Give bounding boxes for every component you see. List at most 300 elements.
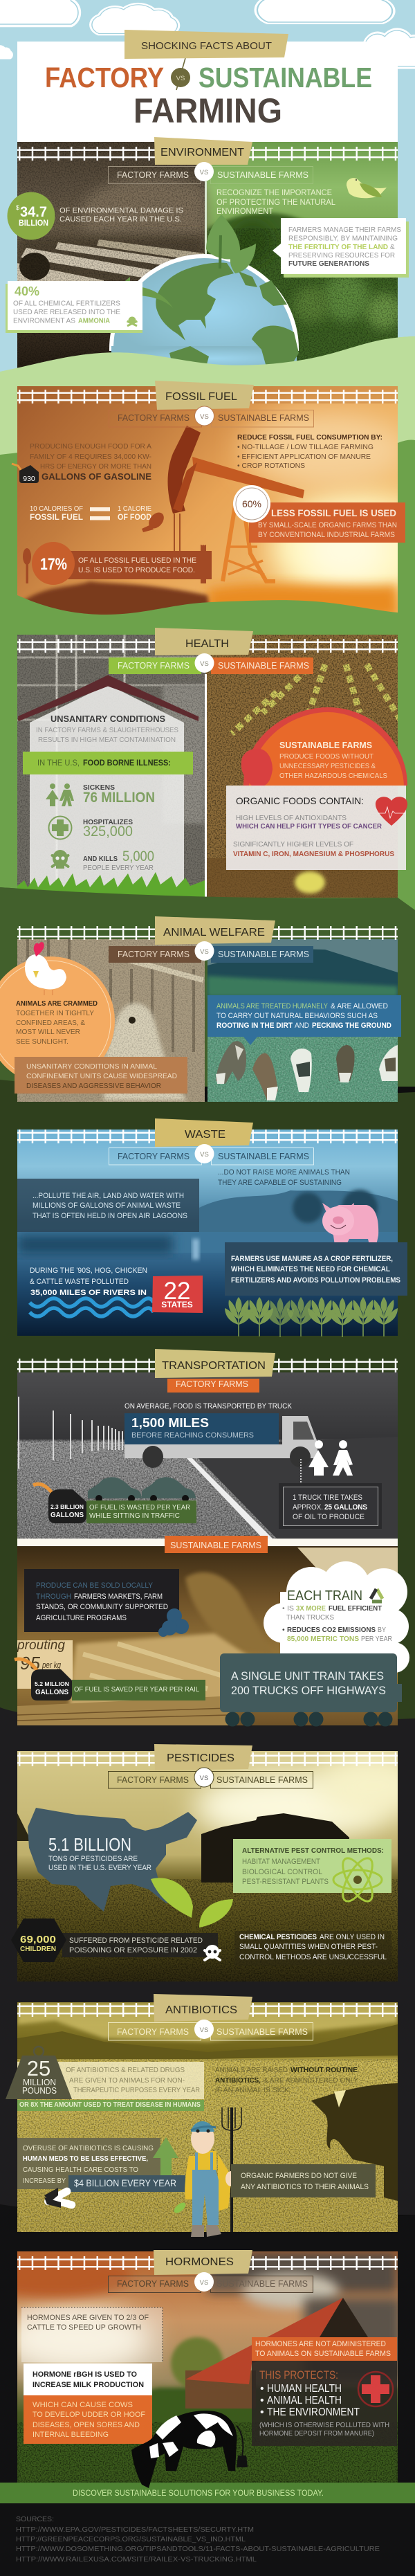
banner: food borne illness: IN THE U.S, bbox=[37, 759, 80, 768]
icon: wheat bbox=[225, 1297, 398, 1337]
vs badge: VS bbox=[176, 75, 185, 82]
heading sign: antibiotics bbox=[154, 1994, 252, 2022]
box: pollute: ...POLLUTE THE AIR, LAND AND WATER WITH bbox=[33, 1192, 184, 1200]
sources: HTTP://WWW.RAILEXUSA.COM/SITE/RAILEX-VS-TRUCKING.HTML bbox=[16, 2555, 257, 2564]
sources: HTTP://WWW.DOSOMETHING.ORG/TIPSANDTOOLS/11-FACTS-ABOUT-SUSTAINABLE-AGRICULTURE bbox=[16, 2545, 380, 2553]
box: organic foods contain: WHICH CAN HELP FIGHT TYPES OF CANCER bbox=[236, 822, 382, 831]
cloud: each train: THAN TRUCKS bbox=[286, 1613, 334, 1622]
box: truck tire: 25 GALLONS bbox=[324, 1503, 367, 1512]
cloud: each train: 3X MORE bbox=[296, 1604, 326, 1613]
fence bbox=[17, 639, 398, 653]
cloud: each train bbox=[264, 1561, 409, 1673]
icon: river waves bbox=[30, 1298, 154, 1316]
vs circle bbox=[194, 2272, 214, 2292]
stat: 69000 children bbox=[11, 1919, 218, 1962]
stat: $34.7 billion bbox=[7, 192, 55, 239]
text: sustainable farms produce: OTHER HAZARDOUS CHEMICALS bbox=[279, 772, 387, 780]
heading sign: waste: WASTE bbox=[185, 1129, 225, 1141]
heading sign: fossil fuel bbox=[155, 381, 254, 410]
callout: 40 percent: AMMONIA bbox=[78, 317, 110, 325]
callout: 40 percent: USED ARE RELEASED INTO THE bbox=[13, 308, 120, 316]
heading sign: antibiotics: ANTIBIOTICS bbox=[165, 2004, 237, 2016]
stat: sickens bbox=[83, 784, 155, 806]
icon: pig bbox=[322, 1203, 378, 1246]
box: produce sold locally: AGRICULTURE PROGRAMS bbox=[36, 1614, 127, 1622]
box: not administered: • bbox=[260, 2383, 264, 2395]
vs circle bbox=[195, 941, 214, 961]
circle: animals are crammed: MOST WILL NEVER bbox=[16, 1028, 80, 1036]
callout: blue text box: ANIMALS ARE TREATED HUMANELY bbox=[216, 1002, 329, 1010]
panel: transportation factory bbox=[17, 1349, 415, 1539]
box: rbgh: INTERNAL BLEEDING bbox=[33, 2431, 109, 2439]
tag: factory farms: FACTORY FARMS bbox=[118, 412, 190, 423]
box: produce sold locally: STANDS, OR COMMUNITY SUPPORTED bbox=[36, 1603, 168, 1611]
cloud: each train: • bbox=[282, 1604, 285, 1613]
map: usa: TONS OF PESTICIDES ARE bbox=[48, 1855, 138, 1863]
tag: sustainable farms: SUSTAINABLE FARMS bbox=[218, 412, 309, 423]
heading sign: waste bbox=[155, 1118, 253, 1147]
box: truck tire: 1 TRUCK TIRE TAKES bbox=[293, 1494, 362, 1502]
icon: leaves bbox=[206, 215, 256, 273]
fence bbox=[17, 2003, 398, 2017]
stat: $34.7 billion: 34.7 bbox=[20, 204, 47, 220]
text: reduce fossil fuel bbox=[237, 433, 382, 470]
stat: sickens: 76 MILLION bbox=[83, 790, 155, 806]
cloud: each train: IS bbox=[287, 1604, 294, 1613]
tag: sustainable farms: SUSTAINABLE FARMS bbox=[216, 1775, 308, 1785]
continent shapes bbox=[156, 263, 299, 367]
stat: 1500 miles bbox=[124, 1413, 279, 1444]
icon: weight 25 million pounds bbox=[6, 2047, 72, 2099]
tag: factory farms bbox=[109, 657, 201, 674]
text: reduce fossil fuel: REDUCE FOSSIL FUEL CONSUMPTION BY: bbox=[237, 433, 382, 442]
vs circle: VS bbox=[200, 169, 208, 176]
vs badge bbox=[171, 68, 190, 87]
tag: factory farms bbox=[108, 166, 201, 184]
dotted connector bbox=[300, 1459, 302, 1483]
heading sign: transportation: TRANSPORTATION bbox=[162, 1360, 266, 1372]
cows bbox=[216, 1041, 398, 1100]
tag: factory farms bbox=[108, 2276, 201, 2292]
tag: sustainable farms: SUSTAINABLE FARMS bbox=[216, 2026, 308, 2037]
panel: waste bbox=[17, 1118, 407, 1337]
tag: factory farms: FACTORY FARMS bbox=[117, 2278, 189, 2289]
tag: factory farms bbox=[108, 2022, 201, 2040]
stat: 69000 children: SUFFERED FROM PESTICIDE RELATED bbox=[69, 1936, 203, 1945]
icon: people bbox=[308, 1440, 353, 1476]
text: reduce fossil fuel: • EFFICIENT APPLICATION OF MANURE bbox=[237, 453, 371, 461]
stat: 17 percent: OF ALL FOSSIL FUEL USED IN THE bbox=[78, 556, 196, 565]
box: chemical pesticides: CONTROL METHODS ARE UNSUCCESSFUL bbox=[239, 1953, 387, 1961]
callout: 60 percent: BY SMALL-SCALE ORGANIC FARMS THAN bbox=[258, 521, 397, 529]
vs circle: VS bbox=[200, 2279, 208, 2287]
stat: 22 states: STATES bbox=[161, 1300, 193, 1309]
globe bbox=[111, 256, 299, 367]
title sign: shocking facts about: SHOCKING FACTS ABOUT bbox=[141, 41, 272, 52]
icon: skull bbox=[50, 850, 70, 869]
text: rivers polluted: 35,000 MILES OF RIVERS IN bbox=[30, 1289, 147, 1297]
box: not administered: ANIMAL HEALTH bbox=[267, 2395, 342, 2406]
tractor silhouette bbox=[201, 1813, 349, 1883]
callout: 40 percent bbox=[6, 281, 142, 333]
panel: antibiotics bbox=[6, 1994, 398, 2237]
box: hormones given: HORMONES ARE GIVEN TO 2/3 OF bbox=[27, 2314, 149, 2322]
box: truck tire: APPROX. bbox=[293, 1503, 323, 1512]
stat: fuel wasted: WHILE SITTING IN TRAFFIC bbox=[89, 1512, 180, 1520]
stat: fuel wasted bbox=[33, 1484, 196, 1523]
callout: blue text box: ROOTING IN THE DIRT bbox=[216, 1022, 293, 1030]
text: environmental damage bbox=[59, 206, 183, 224]
heading sign: environment bbox=[154, 137, 252, 165]
tag: sustainable farms bbox=[212, 410, 314, 427]
vs circle bbox=[195, 1144, 214, 1163]
icon: pepper bbox=[241, 749, 273, 786]
equation: calories bbox=[30, 505, 151, 522]
stat: kills bbox=[83, 849, 154, 872]
text: average food transport: ON AVERAGE, FOOD IS TRANSPORTED BY TRUCK bbox=[124, 1402, 293, 1411]
text: sustainable farms produce: UNNECESSARY PESTICIDES & bbox=[279, 762, 376, 770]
cow bbox=[311, 2083, 398, 2201]
box: produce sold locally: THROUGH bbox=[36, 1593, 71, 1601]
tag: factory farms bbox=[109, 1148, 202, 1165]
stat: 22 states: 22 bbox=[164, 1278, 190, 1305]
cloud: each train: PER YEAR bbox=[361, 1635, 392, 1643]
icon: chicken leg bbox=[142, 509, 167, 532]
stat: kills: PEOPLE EVERY YEAR bbox=[83, 864, 154, 872]
icon: people bbox=[46, 783, 74, 806]
tag: sustainable farms bbox=[165, 1536, 268, 1553]
circle: animals are crammed: SEE SUNLIGHT. bbox=[16, 1037, 68, 1046]
text: recognize importance: RECOGNIZE THE IMPORTANCE bbox=[216, 189, 332, 197]
band: discover bbox=[0, 2483, 415, 2503]
text: producing enough food: FAMILY OF 4 REQUIRES 34,000 KW- bbox=[30, 453, 151, 461]
box: produce sold locally: FARMERS MARKETS, FARM bbox=[74, 1593, 163, 1601]
stat: fuel wasted: OF FUEL IS WASTED PER YEAR bbox=[89, 1503, 190, 1512]
stat: $34.7 billion: $ bbox=[16, 204, 19, 211]
panel: fossil fuel bbox=[12, 381, 415, 626]
vs circle: VS bbox=[200, 660, 209, 668]
panel: transportation sustainable: prouting bbox=[17, 1638, 65, 1653]
icon: spoon and fork bbox=[23, 545, 206, 583]
title: sustainable: SUSTAINABLE bbox=[199, 62, 372, 93]
text: producing enough food: HRS OF ENERGY OR MORE THAN bbox=[40, 462, 151, 471]
heading sign: environment: ENVIRONMENT bbox=[160, 147, 245, 158]
equation: calories: OF FOOD bbox=[118, 514, 151, 522]
box: alternative pest control: BIOLOGICAL CONTROL bbox=[242, 1868, 322, 1876]
icon: grapes bbox=[158, 1608, 189, 1637]
text: rivers polluted: & CATTLE WASTE POLLUTED bbox=[30, 1278, 129, 1286]
text: sustainable farms produce bbox=[279, 740, 387, 780]
banner: food borne illness bbox=[23, 752, 193, 774]
stat: hospitalizes: HOSPITALIZES bbox=[83, 819, 133, 826]
map: usa bbox=[28, 1808, 197, 1912]
heading sign: animal welfare bbox=[155, 916, 275, 945]
box: alternative pest control: HABITAT MANAGEMENT bbox=[242, 1858, 320, 1866]
arrow bbox=[113, 277, 173, 308]
box: overuse of antibiotics: OVERUSE OF ANTIBIOTICS IS CAUSING bbox=[23, 2144, 154, 2152]
box: truck tire: OF OIL TO PRODUCE bbox=[293, 1513, 365, 1521]
tag: sustainable farms bbox=[212, 1148, 314, 1165]
text: producing enough food bbox=[30, 442, 151, 482]
stat: 69000 children: POISONING OR EXPOSURE IN 2002 bbox=[69, 1946, 197, 1954]
icon: medical cross bbox=[48, 817, 72, 839]
stat: fuel saved: 5.2 MILLION bbox=[35, 1680, 69, 1687]
tag: sustainable farms bbox=[210, 2022, 313, 2040]
stat: 22 states bbox=[152, 1276, 203, 1313]
box: not administered: (WHICH IS OTHERWISE POLLUTED WITH bbox=[259, 2421, 389, 2429]
tag: factory farms: FACTORY FARMS bbox=[117, 1775, 189, 1785]
tag: sustainable farms: SUSTAINABLE FARMS bbox=[218, 949, 309, 959]
vs circle bbox=[194, 1768, 214, 1787]
equation: calories: 10 CALORIES OF bbox=[30, 505, 83, 513]
stat: hospitalizes: 325,000 bbox=[83, 824, 133, 840]
box: antibiotics given: OR 8X THE AMOUNT USED TO TREAT DISEASE IN HUMANS bbox=[19, 2101, 201, 2109]
icon: cars in traffic bbox=[88, 1477, 196, 1502]
box: unsanitary conditions: UNSANITARY CONDITIONS IN ANIMAL bbox=[26, 1062, 157, 1071]
box: not administered: THIS PROTECTS: bbox=[259, 2368, 338, 2382]
callout: 60 percent: BY CONVENTIONAL INDUSTRIAL FARMS bbox=[258, 531, 395, 539]
panel: animal welfare bbox=[0, 916, 401, 1102]
cloud: each train: EACH TRAIN bbox=[287, 1588, 362, 1604]
stat: 1500 miles: BEFORE REACHING CONSUMERS bbox=[131, 1431, 254, 1440]
icon: pills bbox=[43, 2186, 77, 2209]
box: manure bbox=[225, 1242, 407, 1296]
tag: sustainable farms: SUSTAINABLE FARMS bbox=[218, 1151, 309, 1161]
box: antibiotics given: ARE GIVEN TO ANIMALS FOR NON- bbox=[69, 2076, 185, 2085]
text: without routine antibiotics: ANTIBIOTICS, bbox=[215, 2076, 261, 2085]
icon: train bbox=[220, 1653, 402, 1726]
box: overuse of antibiotics: INCREASE BY bbox=[23, 2177, 66, 2185]
text: unsanitary conditions: IN FACTORY FARMS & SLAUGHTERHOUSES bbox=[36, 726, 178, 734]
text: without routine antibiotics: IF AN ANIMAL IS SICK bbox=[215, 2086, 289, 2094]
stat: sickens: SICKENS bbox=[83, 784, 115, 792]
hill bbox=[17, 595, 398, 626]
cloud: each train: • bbox=[282, 1626, 285, 1634]
tag: factory farms bbox=[109, 946, 201, 963]
text: unsanitary conditions: RESULTS IN HIGH MEAT CONTAMINATION bbox=[38, 736, 176, 744]
text: rivers polluted: DURING THE '90S, HOG, CHICKEN bbox=[30, 1267, 147, 1275]
vs circle: VS bbox=[200, 948, 209, 956]
text: do not raise bbox=[218, 1168, 350, 1187]
box: rbgh: TO DEVELOP UDDER OR HOOF bbox=[33, 2411, 145, 2419]
box: chemical pesticides: ARE ONLY USED IN bbox=[320, 1933, 385, 1941]
callout: 60 percent: LESS FOSSIL FUEL IS USED bbox=[271, 507, 396, 518]
grass bbox=[17, 872, 205, 898]
panel: transportation sustainable: per kg bbox=[42, 1660, 62, 1670]
box: pollute bbox=[17, 1179, 199, 1232]
text: sustainable farms produce: PRODUCE FOODS WITHOUT bbox=[279, 752, 374, 761]
heading sign: hormones: HORMONES bbox=[165, 2256, 234, 2268]
arrow up bbox=[153, 2137, 178, 2175]
band: discover: DISCOVER SUSTAINABLE SOLUTIONS FOR YOUR BUSINESS TODAY. bbox=[73, 2489, 324, 2498]
box: rbgh: DISEASES, OPEN SORES AND bbox=[33, 2421, 140, 2429]
fence bbox=[17, 147, 398, 161]
vs circle bbox=[195, 406, 214, 426]
tag: factory farms bbox=[108, 1772, 201, 1788]
box: manure: FERTILIZERS AND AVOIDS POLLUTION PROBLEMS bbox=[231, 1276, 400, 1285]
box: alternative pest control: PEST-RESISTANT PLANTS bbox=[242, 1878, 329, 1886]
text: environmental damage: OF ENVIRONMENTAL DAMAGE IS bbox=[59, 206, 183, 215]
vs circle: VS bbox=[200, 1151, 209, 1159]
icon: skull bbox=[203, 1945, 222, 1962]
box: pollute: MILLIONS OF GALLONS OF ANIMAL WASTE bbox=[33, 1201, 181, 1210]
callout: blue text box: PECKING THE GROUND bbox=[312, 1022, 391, 1030]
box: unsanitary conditions: DISEASES AND AGGRESSIVE BEHAVIOR bbox=[26, 1082, 161, 1090]
text: do not raise: THEY ARE CAPABLE OF SUSTAINING bbox=[218, 1179, 342, 1187]
text: recognize importance: ENVIRONMENT bbox=[216, 208, 273, 216]
circle: animals are crammed: TOGETHER IN TIGHTLY bbox=[16, 1009, 94, 1017]
icon: weight 25 million pounds: POUNDS bbox=[22, 2085, 57, 2096]
title: farming: FARMING bbox=[133, 91, 282, 130]
text: sustainable farms produce: SUSTAINABLE FARMS bbox=[279, 740, 372, 750]
stat: kills: 5,000 bbox=[122, 849, 154, 864]
heading sign: transportation bbox=[155, 1349, 275, 1378]
panel: transportation sustainable bbox=[15, 1536, 409, 1726]
fence bbox=[17, 390, 398, 403]
tag: factory farms: FACTORY FARMS bbox=[117, 2026, 189, 2037]
cloud: each train: BY bbox=[378, 1626, 386, 1634]
box: not administered: TO ANIMALS ON SUSTAINABLE FARMS bbox=[255, 2350, 391, 2358]
title sign: shocking facts about bbox=[124, 30, 288, 59]
callout: 60 percent: 60% bbox=[242, 498, 261, 509]
tag: factory farms bbox=[109, 410, 202, 427]
sources: SOURCES: bbox=[16, 2515, 54, 2523]
tag: sustainable farms: SUSTAINABLE FARMS bbox=[217, 170, 308, 180]
vs circle: VS bbox=[200, 413, 209, 421]
box: chemical pesticides bbox=[234, 1931, 391, 1966]
box: rbgh: INCREASE MILK PRODUCTION bbox=[33, 2381, 144, 2389]
icon: weight 25 million pounds: MILLION bbox=[23, 2077, 56, 2087]
text: unsanitary conditions: UNSANITARY CONDITIONS bbox=[50, 714, 165, 724]
map: usa: 5.1 BILLION bbox=[48, 1834, 131, 1855]
stat: fuel saved bbox=[15, 1659, 205, 1700]
box: not administered: • bbox=[260, 2395, 264, 2406]
sources: HTTP://WWW.EPA.GOV/PESTICIDES/FACTSHEETS/SECURTY.HTM bbox=[16, 2525, 254, 2534]
box: chemical pesticides: CHEMICAL PESTICIDES bbox=[239, 1933, 317, 1941]
icon: fuel jug 930 bbox=[12, 464, 39, 483]
tag: factory farms: FACTORY FARMS bbox=[118, 660, 190, 671]
box: unsanitary conditions bbox=[15, 1057, 187, 1094]
icon: fuel jug 930: 930 bbox=[23, 475, 35, 483]
box: manure: WHICH ELIMINATES THE NEED FOR CHEMICAL bbox=[231, 1265, 390, 1273]
callout: 60 percent bbox=[233, 485, 405, 543]
equation: calories: 1 CALORIE bbox=[118, 505, 151, 513]
box: alternative pest control bbox=[233, 1839, 391, 1905]
box: rbgh: WHICH CAN CAUSE COWS bbox=[33, 2401, 133, 2409]
text: recognize importance: OF PROTECTING THE NATURAL bbox=[216, 199, 336, 207]
callout: 40 percent: OF ALL CHEMICAL FERTILIZERS bbox=[13, 299, 120, 307]
tag: sustainable farms: SUSTAINABLE FARMS bbox=[216, 2278, 308, 2289]
box: rbgh bbox=[24, 2364, 152, 2444]
icon: weight 25 million pounds: 25 bbox=[27, 2056, 50, 2080]
box: hormones given bbox=[21, 2307, 163, 2362]
stat: fuel wasted: GALLONS bbox=[50, 1511, 84, 1519]
box: overuse of antibiotics: CAUSING HEALTH CARE COSTS TO bbox=[23, 2166, 138, 2174]
callout: farmers manage: FUTURE GENERATIONS bbox=[288, 260, 369, 268]
box: manure: FARMERS USE MANURE AS A CROP FERTILIZER, bbox=[231, 1255, 393, 1263]
heading sign: health bbox=[155, 628, 253, 655]
circle: animals are crammed: CONFINED AREAS, & bbox=[16, 1019, 85, 1027]
vs circle: VS bbox=[200, 1775, 208, 1782]
fence bbox=[17, 1359, 398, 1372]
fence bbox=[17, 1130, 398, 1143]
icon: heart bbox=[376, 797, 407, 826]
tag: factory farms: FACTORY FARMS bbox=[176, 1379, 248, 1389]
callout: farmers manage: PRESERVING RESOURCES FOR bbox=[288, 252, 395, 260]
tag: sustainable farms bbox=[211, 946, 313, 963]
box: not administered bbox=[252, 2337, 397, 2446]
box: not administered: HORMONE DEPOSIT FROM MANURE) bbox=[259, 2429, 374, 2438]
box: antibiotics given bbox=[17, 2062, 204, 2111]
box: antibiotics given: THERAPEUTIC PURPOSES EVERY YEAR bbox=[73, 2086, 200, 2094]
heading sign: pesticides bbox=[154, 1744, 252, 1770]
text: without routine antibiotics: & ARE ADMINISTERED ONLY bbox=[264, 2076, 358, 2085]
box: not administered: THE ENVIRONMENT bbox=[267, 2406, 360, 2418]
text: producing enough food: PRODUCING ENOUGH FOOD FOR A bbox=[30, 442, 151, 451]
heading sign: animal welfare: ANIMAL WELFARE bbox=[163, 927, 265, 938]
box: not administered: HORMONES ARE NOT ADMINISTERED bbox=[255, 2340, 386, 2348]
fence bbox=[17, 926, 398, 940]
dome: sustainable farms bbox=[241, 707, 407, 786]
box: overuse of antibiotics: HUMAN MEDS TO BE LESS EFFECTIVE, bbox=[23, 2155, 148, 2163]
heading sign: health: HEALTH bbox=[185, 638, 229, 650]
tag: factory farms: FACTORY FARMS bbox=[118, 949, 190, 959]
stat: fuel wasted: 2.3 BILLION bbox=[50, 1503, 84, 1510]
callout: farmers manage: & bbox=[390, 244, 395, 251]
icon: truck bbox=[124, 1416, 317, 1468]
text: without routine antibiotics: ANIMALS ARE RAISED bbox=[215, 2066, 288, 2074]
icon: chicken bbox=[25, 942, 66, 995]
box: organic foods contain: HIGH LEVELS OF ANTIOXIDANTS bbox=[236, 814, 347, 822]
stat: 69000 children: 69,000 bbox=[20, 1934, 56, 1945]
tag: factory farms bbox=[167, 1379, 259, 1393]
vs circle bbox=[195, 653, 214, 673]
heading sign: pesticides: PESTICIDES bbox=[167, 1752, 234, 1764]
text: reduce fossil fuel: • CROP ROTATIONS bbox=[237, 462, 305, 470]
stat: 17 percent bbox=[32, 542, 212, 585]
icon: atom bbox=[333, 1854, 382, 1905]
fence bbox=[17, 2256, 398, 2270]
tag: factory farms: FACTORY FARMS bbox=[118, 1151, 190, 1161]
box: organic farmers: ORGANIC FARMERS DO NOT GIVE bbox=[241, 2172, 357, 2180]
callout: 40 percent: ENVIRONMENT AS bbox=[13, 317, 75, 325]
vs circle bbox=[194, 162, 214, 181]
sources: HTTP://GREENPEACECORPS.ORG/SUSTAINABLE_VS_IND.HTML bbox=[16, 2535, 246, 2543]
callout: blue text box: & ARE ALLOWED bbox=[331, 1002, 388, 1010]
callout: blue text box: TO CARRY OUT NATURAL BEHAVIORS SUCH AS bbox=[216, 1012, 378, 1020]
panel: transportation sustainable: 95 bbox=[20, 1653, 40, 1674]
text: recognize importance bbox=[216, 189, 336, 216]
box: overuse of antibiotics: $4 BILLION EVERY YEAR bbox=[74, 2177, 176, 2188]
box: organic foods contain: VITAMIN C, IRON, MAGNESIUM & PHOSPHORUS bbox=[233, 850, 394, 858]
box: alternative pest control: ALTERNATIVE PEST CONTROL METHODS: bbox=[242, 1847, 384, 1855]
box: produce sold locally bbox=[24, 1569, 179, 1632]
title panel bbox=[17, 30, 398, 142]
box: hormones given: CATTLE TO SPEED UP GROWTH bbox=[27, 2323, 141, 2332]
heading sign: fossil fuel: FOSSIL FUEL bbox=[165, 391, 237, 403]
heading sign: hormones bbox=[154, 2250, 252, 2275]
text: without routine antibiotics: WITHOUT ROUTINE bbox=[290, 2066, 358, 2074]
circle: animals are crammed bbox=[0, 942, 115, 1085]
fence bbox=[17, 1752, 398, 1766]
box: truck tire bbox=[279, 1483, 382, 1529]
stat: 17 percent: U.S. IS USED TO PRODUCE FOOD. bbox=[78, 566, 195, 574]
callout: blue text box bbox=[208, 995, 401, 1045]
callout: farmers manage: RESPONSIBLY, BY MAINTAINING bbox=[288, 235, 398, 242]
icon: recycle bbox=[371, 1589, 382, 1602]
stat: fuel saved: GALLONS bbox=[35, 1688, 68, 1696]
callout: blue text box: AND bbox=[295, 1022, 309, 1030]
